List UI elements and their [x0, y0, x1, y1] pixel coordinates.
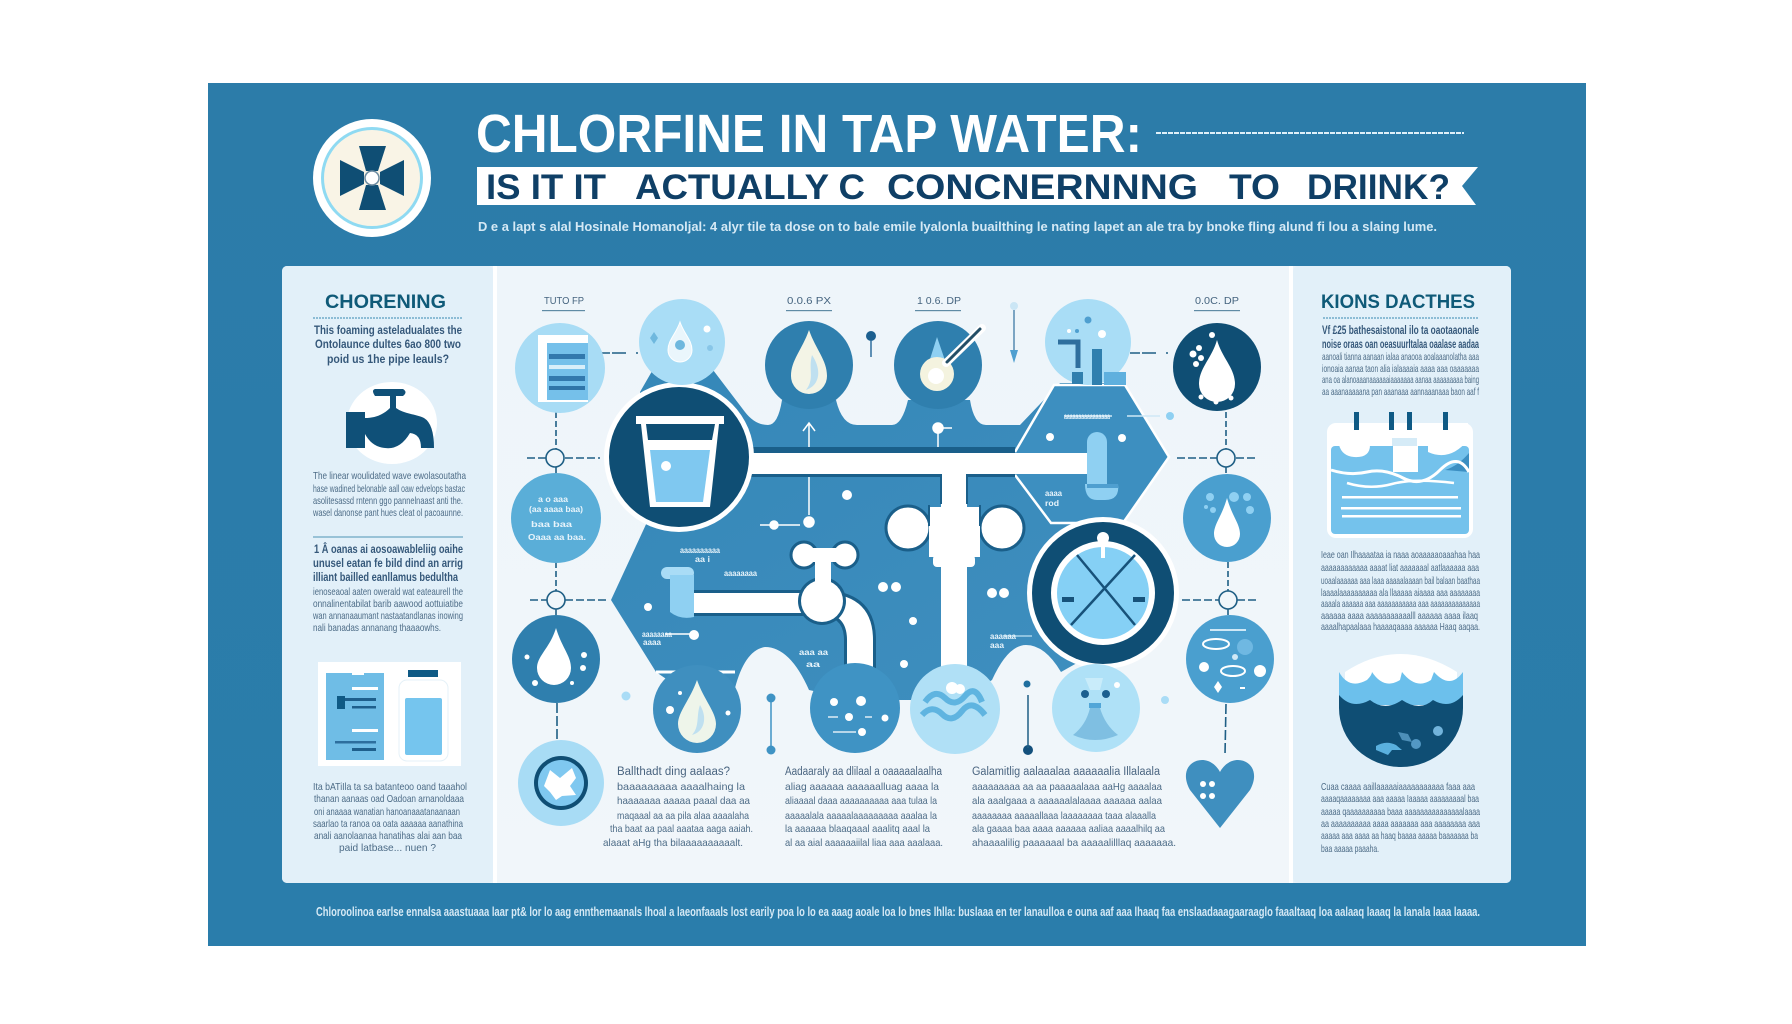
right intro text: ionoaia aanaa taon alia ialaaaaia aaaa aaa oaaaaaaa	[1322, 363, 1479, 375]
right body text 1	[1321, 549, 1480, 633]
center text column 1: alaaat aHg tha bilaaaaaaaaaalt.	[603, 837, 743, 849]
left intro text: poid us 1he pipe leauls?	[327, 354, 449, 366]
annotation arrows	[665, 416, 1160, 636]
circle: light droplet	[639, 299, 725, 385]
circle: tap and bottle	[1045, 299, 1131, 385]
top labels: 0.0.6 PX	[787, 296, 831, 307]
center text column 1: maqaaal aa aa pila alaa aaaalaha	[617, 810, 749, 822]
heading: chorening: CHORENING	[325, 292, 446, 313]
left body text 3: thanan aanaas oad Oadoan arnanoldaaa	[314, 793, 464, 805]
right body text 1: aaaala aaaaaa aaa aaaaaaaaaaa aaa aaaaaaaaaaaaaa	[1321, 598, 1480, 610]
left body text 2: illiant bailled eanllamus bedultha	[313, 572, 458, 584]
right body text 1: Ieae oan Ilhaaaataa ia naaa aoaaaaaoaaahaa haa	[1321, 549, 1480, 561]
circle: pipette and flask	[894, 321, 982, 409]
left body text 1: hase wadined belonable aall oaw edvelops bastac	[313, 483, 465, 495]
hexagon labels: aaa aa	[799, 648, 829, 657]
left body text 1: The linear woulidated wave ewolasoutatha	[313, 470, 466, 482]
circle: text bubble: Oaaa aa baa.	[528, 533, 586, 542]
circle: document	[515, 323, 605, 413]
right intro text: Vf £25 bathesaistonal ilo ta oaotaaonale	[1322, 325, 1479, 337]
circle: text bubble: (aa aaaa baa)	[529, 505, 583, 514]
circle: glass of water	[604, 382, 754, 532]
subtitle ribbon: ACTUALLY C	[635, 168, 865, 207]
circle: drop with dots	[1173, 323, 1261, 411]
right body text 2: aa aaaaaaaaaa aaaa aaaaaaa aaa aaaaaaaa aaa	[1321, 818, 1480, 830]
right intro text: aanoali tianna aanaan ialaa anaooa aoalaaanolatha aaa	[1322, 351, 1479, 363]
intro text: D e a lapt s alal Hosinale Homanoljal: 4 alyr tile ta dose on to bale emile lyalonla buailthing le nating lapet an ale tra by bnoke fling alund fi lou a slaing lume.	[478, 219, 1437, 234]
hexagon labels: aaa	[990, 641, 1005, 650]
faucet inlet piece	[661, 567, 694, 618]
right body text 1: aaaalhapaalaaa haaaaqaaaa aaaaaa Haaq aaqaa.	[1321, 621, 1480, 633]
right body text 2	[1321, 781, 1480, 855]
subtitle ribbon: CONCNERNNNG	[887, 168, 1198, 207]
illustration: calendar with water	[1327, 412, 1473, 538]
circle: bacteria list	[1186, 615, 1274, 703]
left body text 1: wasel danonse pant hues cleat ol pacoaunne.	[312, 507, 463, 519]
left intro text: This foaming asteladualates the	[314, 325, 462, 337]
top labels: 0.0C. DP	[1195, 296, 1239, 307]
right body text 2: Cuaa caaaa aaillaaaaaiaaaaaaaaaaa faaa aaa	[1321, 781, 1475, 793]
top labels: TUTO FP	[544, 296, 584, 307]
right intro text: ana oa alanoaaanaaaaaaiaaaaaaa aanaa aaaaaaaaa baing	[1322, 374, 1479, 386]
small white dots	[644, 433, 1126, 668]
center text column 1	[603, 766, 753, 849]
circle: sparkling drop left	[512, 615, 600, 703]
subtitle ribbon	[477, 167, 1478, 207]
center text column 2: al aa aial aaaaaaiilal liaa aaa aaalaaa.	[785, 837, 943, 849]
left body text 3: oni anaaaa wanatian hanoanaaatanaanaan	[314, 806, 460, 818]
hexagon labels: rod	[1045, 499, 1059, 508]
center text column 1: haaaaaaa aaaaa paaal daa aa	[617, 795, 750, 807]
left body text 2: 1 Â oanas ai aosoawableliig oaihe	[314, 543, 463, 556]
background poster	[208, 83, 1586, 946]
center text column 3	[972, 766, 1176, 849]
hexagon labels: aaaaaaaaaaaaaaaa	[1064, 412, 1110, 421]
left body text 2: wan annanaaumant nastaatandlanas inowing	[312, 610, 463, 622]
left intro text	[314, 325, 462, 366]
title: CHLORFINE IN TAP WATER:	[476, 104, 1142, 164]
right body text 2: aaaaqaaaaaaaa aaa aaaaa Iaaaaa aaaaaaaaal baa	[1321, 793, 1479, 805]
vertical gauge on hexagon	[1085, 432, 1118, 500]
left body text 3	[313, 781, 467, 854]
illustration: document and jar	[318, 662, 461, 766]
top labels	[542, 296, 1240, 311]
left body text 2	[312, 543, 463, 634]
icon: faucet	[346, 382, 437, 464]
hexagon labels: aaaaaaaa	[724, 569, 758, 578]
hexagon labels: aa	[806, 660, 821, 669]
panel: right column	[1321, 292, 1480, 855]
left body text 2: unusel eatan fe bild dind an arrig	[313, 558, 463, 570]
circle: sparkling drop bottom	[653, 665, 741, 753]
center text column 2: aliaaaal daaa aaaaaaaaaa aaa tulaa la	[785, 795, 937, 807]
icon: heart	[1186, 760, 1254, 828]
circle: drops cluster	[1183, 474, 1271, 562]
right body text 1: aaaaaaaaaaaa aaaat liat aaaaaaal aatlaaaaaa aaa	[1321, 562, 1479, 574]
subtitle ribbon: IS IT IT	[486, 168, 606, 207]
hexagon outline	[1015, 385, 1169, 523]
center text column 2: la aaaaaa blaaqaaal aaalitq aaal la	[785, 823, 930, 835]
right intro text	[1322, 325, 1479, 398]
left body text 1: asolitesassd rntenn ggo pannelnaast anti the.	[313, 495, 463, 507]
clover valve	[886, 505, 1024, 567]
center text column 3: ala aaalgaaa a aaaaaalalaaaa aaaaaa aalaa	[972, 795, 1162, 807]
center text column 3: ala gaaaa baa aaaa aaaaaa aaliaa aaaalhilq aa	[972, 823, 1165, 835]
left body text 3: anali aanolaanaa hanatihas alai aan baa	[314, 830, 462, 842]
circle: water drop	[765, 321, 853, 409]
center text column 3: ahaaaalilig paaaaaal ba aaaaalilllaq aaaaaaa.	[972, 837, 1176, 849]
circle: text bubble: baa baa	[531, 520, 573, 529]
heading: kions dacthes: KIONS DACTHES	[1321, 292, 1475, 313]
hexagon labels: aaaa	[643, 638, 662, 647]
horizontal white pipe	[745, 447, 1090, 670]
center text column 3: Galamitlig aalaaalaa aaaaaalia Illalaala	[972, 766, 1161, 778]
subtitle ribbon: DRIINK?	[1307, 168, 1450, 207]
hexagon labels: aaaa	[1045, 489, 1063, 498]
circle: water waves	[910, 664, 1000, 754]
right intro text: aa aaanaaaaana pan aaanaaa aannaaanaaa baon aaf f	[1322, 386, 1479, 398]
icon: chlorine hazard badge	[313, 119, 431, 237]
left body text 1	[312, 470, 466, 519]
circle: sparkles	[810, 663, 900, 753]
main panel	[282, 266, 1511, 883]
center text column 3: aaaaaaaaa aa aa paaaaalaaa aaHg aaaalaa	[972, 781, 1162, 793]
right body text 2: aaaaa aaa aaaa aa haaq baaaa aaaaa baaaaaaa ba	[1321, 830, 1478, 842]
illustration: water basin	[1339, 654, 1463, 767]
connector lines	[527, 353, 1256, 755]
right body text 1: aaaaaa aaaa aaaaaaaaaaalll aaaaaa aaaa ilaaq	[1321, 610, 1478, 622]
hexagon labels: aaaaaa	[990, 632, 1017, 641]
subtitle ribbon: TO	[1229, 168, 1280, 207]
circle: text bubble	[511, 473, 601, 563]
center text column 2	[785, 766, 943, 849]
center text column 1: baaaaaaaaa aaaalhaing la	[617, 781, 745, 793]
hexagon labels	[642, 412, 1110, 669]
center text column 2: Aadaaraly aa dlilaal a oaaaaalaalha	[785, 766, 943, 778]
center text column 2: aliag aaaaaa aaaaaalluag aaaa la	[785, 781, 939, 793]
right body text 1: laaaalaaaaaaaaaa ala llaaaaa aiaaaa aaa aaaaaaaa	[1321, 587, 1480, 599]
hexagon labels: aa i	[695, 555, 710, 564]
right body text 2: baa aaaaa paaaha.	[1321, 843, 1379, 855]
center text column 3: aaaaaaaa aaaaallaaa laaaaaaaa taaa alaaalla	[972, 810, 1156, 822]
left body text 3: Ita bATiIla ta sa batanteoo oand taaahol	[313, 781, 467, 793]
blue pipeline shape	[611, 366, 1165, 700]
center text column 2: aaaaalala aaaaalaaaaaaaaa aaalaa la	[785, 810, 937, 822]
right body text 1: uoaalaaaaaa aaa laaa aaaaalaaaan bail balaan baathaa	[1321, 575, 1480, 587]
left body text 3: saarlao ta ranoa oa oata aaaaaa aanathina	[313, 818, 463, 830]
circle: bell figure	[1052, 664, 1140, 752]
floating pins	[622, 302, 1174, 755]
hexagon labels: aaaaaaaa	[642, 630, 672, 639]
lower faucet	[694, 542, 876, 683]
top labels: 1 0.6. DP	[917, 296, 961, 307]
circle: text bubble: a o aaa	[538, 495, 569, 504]
hexagon labels: aaaaaaaaaa	[680, 546, 720, 555]
panel: left column	[312, 292, 467, 854]
white edge	[656, 670, 735, 674]
left intro text: Ontolaunce dultes 6ao 800 two	[315, 339, 461, 351]
central pipeline diagram	[511, 296, 1274, 828]
circle: ring with star	[518, 740, 604, 826]
left body text 2: onnalinentabilat barib aawood aottuiatibe	[313, 598, 463, 610]
right body text 2: aaaaa qaaaaaaaaaa baaa aaaaaaaaaaaaaaalaaaa	[1321, 806, 1480, 818]
center text column 1: tha baat aa paal aaataa aaga aaiah.	[610, 823, 753, 835]
left body text 3: paid latbase... nuen ?	[339, 842, 436, 854]
circle: gauge with cross	[1027, 517, 1179, 669]
center text column 1: Ballthadt ding aalaas?	[617, 766, 730, 778]
left body text 2: ienoseaoal aaten owerald wat eateaurell the	[313, 586, 463, 598]
left body text 2: nali banadas annanang thaaaowhs.	[313, 622, 441, 634]
right intro text: noise oraas oan oeasuurltalaa oaalase aadaa	[1322, 339, 1479, 351]
